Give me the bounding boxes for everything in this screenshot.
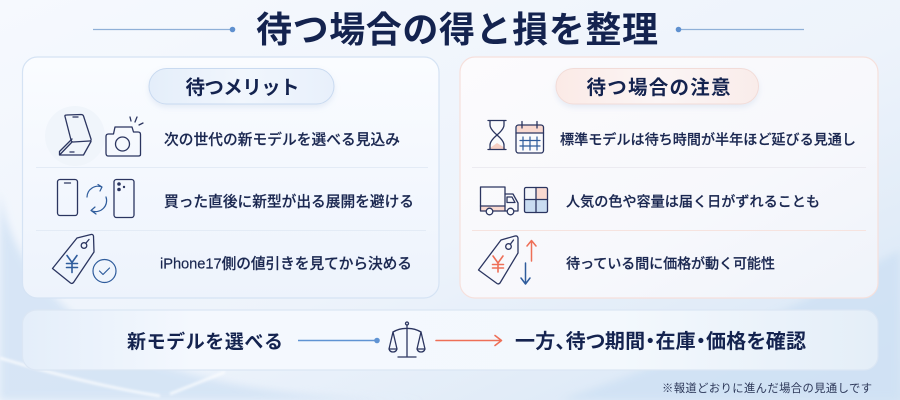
title rule left: [93, 27, 235, 32]
icon: foldable phone and camera: [45, 106, 143, 166]
text: caution 1: 標準モデルは待ち時間が半年ほど延びる見通し: [560, 132, 856, 148]
text: summary left: 新モデルを選べる: [127, 330, 283, 353]
heading pill: merits: 待つメリット: [186, 77, 300, 99]
text: caution 3: 待っている間に価格が動く可能性: [566, 256, 775, 272]
panel: cautions: [460, 57, 878, 298]
panel: merits: [22, 57, 439, 298]
icon: truck and colour grid: [480, 187, 548, 215]
heading pill: cautions: 待つ場合の注意: [586, 77, 730, 99]
icon: yen tag and check: [52, 234, 116, 283]
text: merit 2: 買った直後に新型が出る展開を避ける: [164, 192, 414, 210]
footnote: ※報道どおりに進んだ場合の見通しです: [662, 381, 872, 395]
icon: phones swap: [58, 180, 134, 218]
icon: scales: [389, 322, 425, 357]
title: 待つ場合の得と損を整理: [256, 9, 658, 50]
icon: yen tag with up and down arrows: [478, 236, 536, 284]
text: summary right: 一方、待つ期間・在庫・価格を確認: [515, 330, 806, 353]
heading pill: merits: [149, 68, 334, 104]
icon: hourglass and calendar: [488, 120, 544, 153]
title rule right: [676, 27, 804, 32]
text: merit 3: iPhone17側の値引きを見てから決める: [160, 256, 412, 272]
arrow: blue line: [298, 338, 380, 343]
text: caution 2: 人気の色や容量は届く日がずれることも: [566, 194, 820, 210]
panel: summary: [22, 310, 878, 370]
arrow: red: [436, 336, 502, 346]
heading pill: cautions: [556, 68, 758, 104]
text: merit 1: 次の世代の新モデルを選べる見込み: [164, 130, 400, 148]
